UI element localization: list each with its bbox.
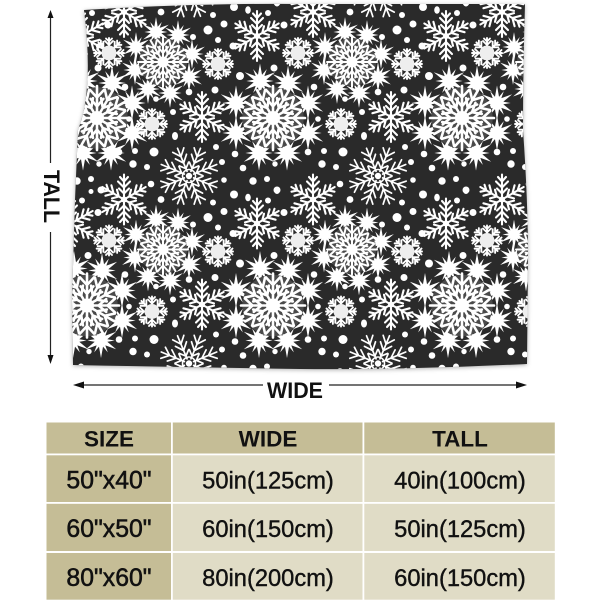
table row: 80x60	[46, 553, 555, 600]
table row: 60x50: 50in(125cm)	[394, 517, 526, 543]
table row: 50x40: 40in(100cm)	[394, 468, 526, 494]
label: TALL: TALL	[39, 170, 64, 223]
label: WIDE: WIDE	[267, 378, 323, 403]
arrow: tall upward	[48, 10, 54, 163]
arrow: tall downward	[48, 232, 54, 364]
table header row: SIZE	[84, 426, 134, 452]
arrow: wide rightward	[329, 382, 527, 388]
table row: 60x50: 60in(150cm)	[202, 517, 334, 543]
table header row	[46, 422, 555, 454]
table row: 80x60: 60in(150cm)	[394, 566, 526, 592]
table row: 60x50	[46, 504, 555, 551]
arrow: wide leftward	[73, 382, 263, 388]
table header row: WIDE	[239, 426, 297, 452]
table row: 80x60: 80in(200cm)	[202, 566, 334, 592]
table row: 60x50: 60"x50"	[66, 516, 152, 543]
table row: 80x60: 80"x60"	[66, 565, 152, 592]
table row: 50x40: 50"x40"	[66, 468, 152, 494]
table header row: TALL	[432, 426, 488, 452]
size table	[46, 422, 555, 600]
table row: 50x40	[46, 455, 555, 502]
table row: 50x40: 50in(125cm)	[202, 468, 334, 494]
blanket with snowflake pattern	[70, 2, 530, 372]
